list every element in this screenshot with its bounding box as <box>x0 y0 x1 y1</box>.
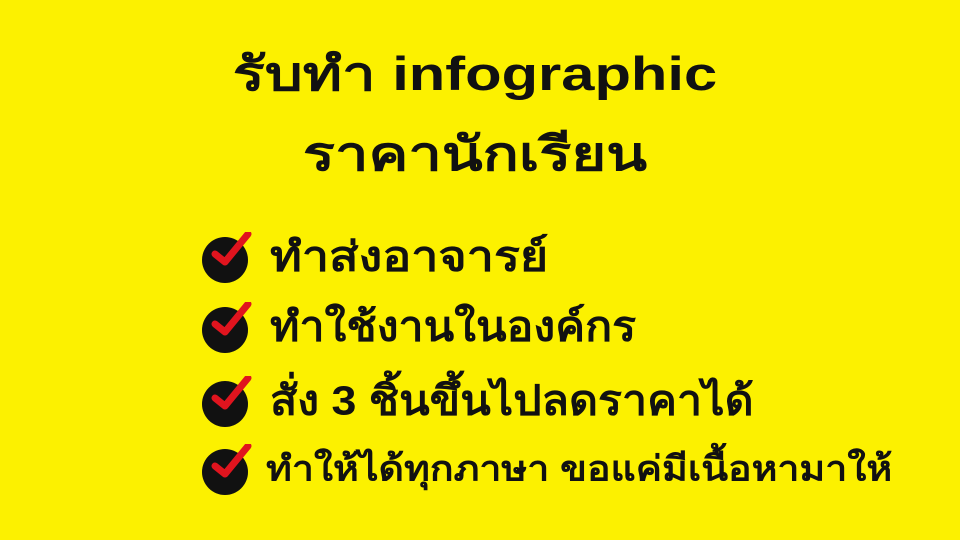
item 3: สั่ง 3 ชิ้นขึ้นไปลดราคาได้ <box>270 378 754 424</box>
item 2: ทำใช้งานในองค์กร <box>270 304 636 350</box>
icon: check <box>202 232 252 283</box>
title: รับทำ infographic <box>233 47 717 100</box>
icon: check <box>202 302 252 353</box>
item 4 <box>202 442 892 495</box>
icon: check <box>202 444 252 495</box>
icon: check <box>202 376 252 427</box>
item 1: ทำส่งอาจารย์ <box>270 234 548 280</box>
item 4: ทำให้ได้ทุกภาษา ขอแค่มีเนื้อหามาให้ <box>266 450 892 488</box>
subtitle: ราคานักเรียน <box>303 127 647 180</box>
